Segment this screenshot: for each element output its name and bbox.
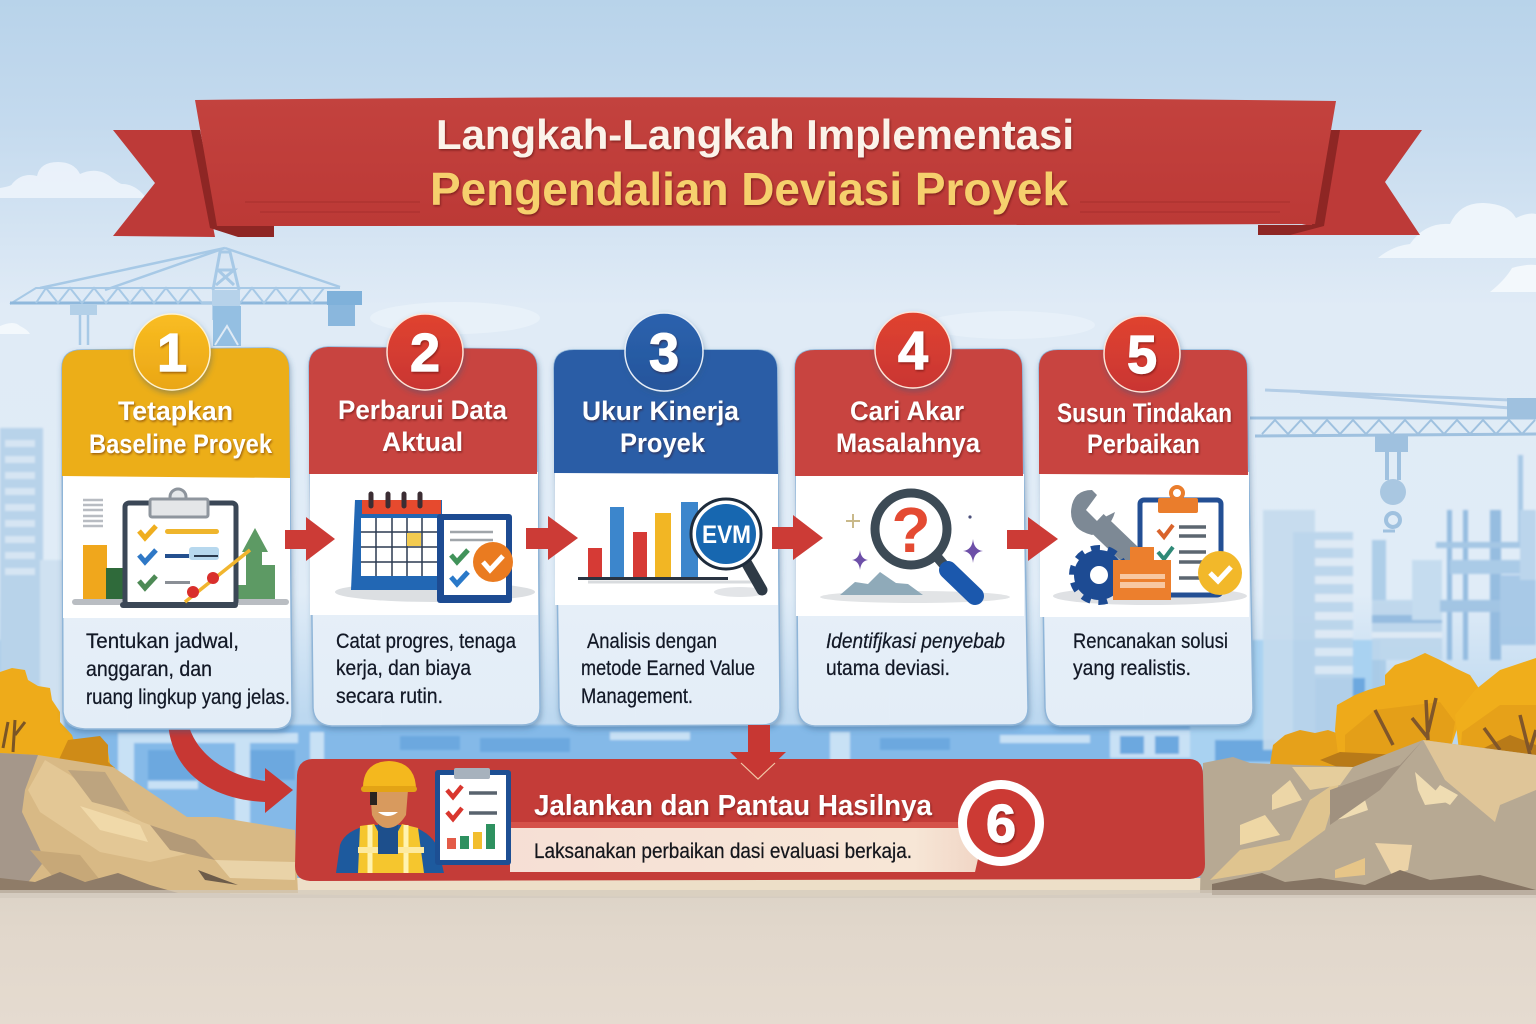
number 3: 3 — [649, 323, 679, 383]
icon: magnifier question — [820, 493, 1010, 603]
body text: Analisis dengan — [587, 630, 717, 653]
trees right — [1270, 653, 1536, 772]
icon: clipboard plan — [72, 489, 289, 608]
body text: kerja, dan biaya — [336, 657, 471, 680]
background city left — [0, 428, 64, 750]
heading: Perbarui Data — [338, 395, 508, 425]
arrow down to step 6 — [730, 725, 786, 779]
panel: step 4 — [795, 312, 1028, 726]
heading — [836, 396, 981, 458]
sand strip under bar — [230, 878, 1230, 897]
number 4: 4 — [898, 321, 928, 381]
number 3 — [625, 313, 703, 391]
heading: Susun Tindakan — [1057, 398, 1232, 428]
body text — [86, 630, 290, 709]
background city right — [1263, 455, 1536, 752]
icon: worker — [336, 761, 444, 873]
body text: secara rutin. — [336, 685, 443, 708]
banner folds — [191, 130, 1340, 237]
panel: step 6 bar — [295, 759, 1205, 881]
heading — [1057, 398, 1232, 459]
ground shade strip — [0, 890, 1536, 898]
highlight strip — [510, 822, 965, 830]
heading: Cari Akar — [850, 396, 964, 426]
heading — [89, 396, 273, 459]
body text: metode Earned Value — [581, 657, 755, 680]
banner crease lines — [245, 202, 1290, 212]
banner right tail — [1258, 130, 1422, 235]
icon: report clipboard — [435, 768, 511, 865]
icon: wrench gear checklist — [1053, 487, 1247, 605]
background crane right — [1250, 390, 1536, 531]
step 6 text: Laksanakan perbaikan dasi evaluasi berkaja. — [534, 840, 912, 863]
icon: EVM bar chart: EVM — [702, 521, 751, 549]
panel: step 5 — [1039, 316, 1253, 726]
number 5: 5 — [1127, 325, 1157, 385]
icon: magnifier question: ? — [891, 494, 931, 566]
body text: yang realistis. — [1073, 657, 1191, 680]
body text — [1073, 630, 1228, 680]
trees left — [0, 668, 115, 768]
heading — [338, 395, 508, 457]
banner left tail — [113, 130, 215, 237]
heading: Perbaikan — [1087, 429, 1200, 459]
body text — [826, 630, 1005, 680]
sand hill right — [1200, 740, 1536, 895]
arrow 1 to 2 — [285, 517, 335, 561]
body text: Identifjkasi penyebab — [826, 630, 1005, 653]
heading: Baseline Proyek — [89, 429, 273, 459]
arrow 2 to 3 — [526, 516, 578, 560]
clouds — [0, 162, 1536, 339]
sand hill left — [0, 753, 298, 893]
step 6 heading: Jalankan dan Pantau Hasilnya — [534, 790, 933, 822]
body text: utama deviasi. — [826, 657, 950, 680]
title line 1: Langkah-Langkah Implementasi — [436, 111, 1074, 158]
heading: Aktual — [382, 427, 463, 457]
heading: Tetapkan — [118, 396, 233, 426]
ground — [0, 888, 1536, 1024]
number 1: 1 — [157, 323, 187, 383]
number 5 — [1104, 316, 1180, 392]
panel: step 2 — [309, 314, 540, 726]
arrow 3 to 4 — [772, 515, 823, 560]
body text: Catat progres, tenaga — [336, 630, 516, 653]
banner main — [195, 97, 1336, 226]
heading: Proyek — [620, 428, 706, 458]
background city band — [0, 640, 1380, 890]
body text — [581, 630, 755, 708]
arrow 4 to 5 — [1007, 517, 1058, 561]
number 2 — [387, 314, 463, 390]
body text: ruang lingkup yang jelas. — [86, 686, 290, 709]
curved arrow to step 6 — [168, 723, 293, 813]
number 6: 6 — [986, 794, 1016, 854]
body text: Management. — [581, 685, 693, 708]
body text: Rencanakan solusi — [1073, 630, 1228, 653]
title line 2: Pengendalian Deviasi Proyek — [430, 163, 1068, 215]
number 2: 2 — [410, 323, 440, 383]
heading — [582, 396, 740, 458]
background crane left — [10, 248, 362, 346]
body text: anggaran, dan — [86, 658, 212, 681]
body text — [336, 630, 516, 708]
panel: step 3 — [554, 313, 780, 726]
description strip — [510, 828, 985, 872]
number 4 — [875, 312, 951, 388]
title banner — [113, 97, 1422, 237]
panel: step 1 — [62, 314, 292, 729]
icon: calendar and report — [335, 494, 535, 603]
body text: Tentukan jadwal, — [86, 630, 239, 653]
icon: EVM bar chart — [578, 499, 766, 597]
heading: Masalahnya — [836, 428, 981, 458]
number 6 — [958, 780, 1044, 866]
number 1 — [134, 314, 210, 390]
heading: Ukur Kinerja — [582, 396, 740, 426]
